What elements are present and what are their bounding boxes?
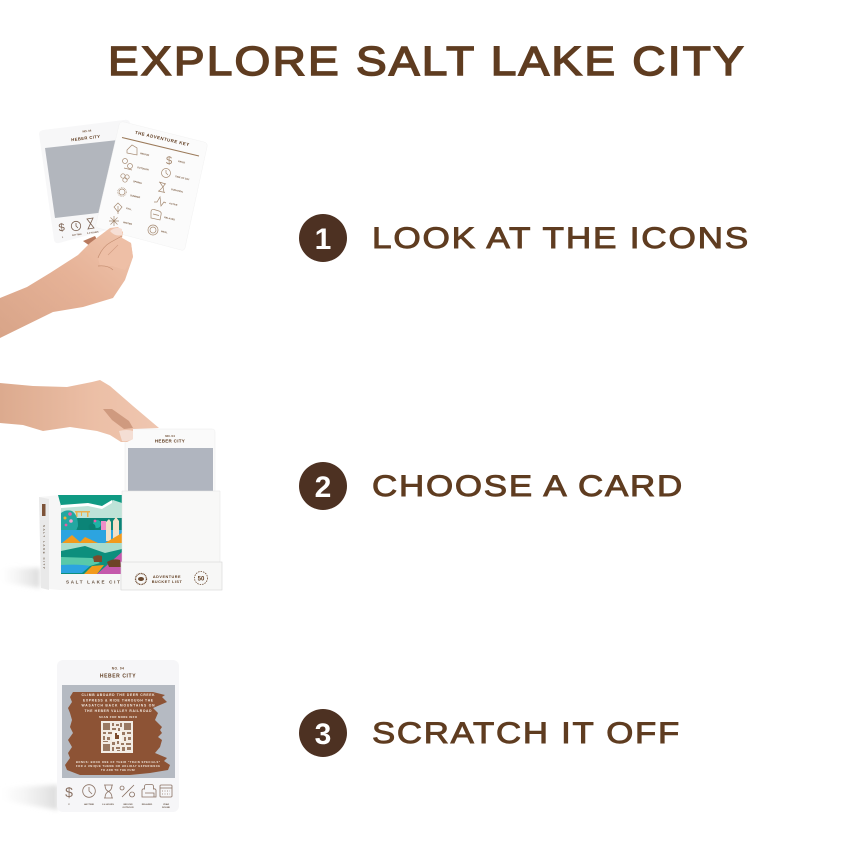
icon labels: ANYTIME — [84, 803, 94, 806]
icon labels: ROUND — [162, 807, 170, 809]
card: the adventure key: SUMMER — [130, 195, 141, 199]
card: back card with scratch panel: $ — [58, 222, 65, 234]
step 2 label: CHOOSE A CARD — [372, 470, 684, 503]
scratch message: TO ADD TO THE FUN! — [101, 768, 135, 772]
QR code — [101, 721, 133, 753]
icon labels: RELAXED — [142, 803, 153, 806]
card: the adventure key: FALL — [126, 207, 133, 211]
box artwork — [58, 495, 122, 574]
box sleeve: 50 — [198, 576, 205, 582]
card being pulled from sleeve: HEBER CITY — [155, 438, 185, 444]
box: salt lake city deck: SALT LAKE CITY — [42, 525, 46, 570]
step 3 badge: 3 — [315, 718, 331, 751]
hand pulling card — [0, 380, 159, 442]
card: the adventure key: DURATION — [171, 188, 183, 194]
card: the adventure key: ACTIVE — [169, 202, 178, 207]
card: Heber City scratched: NO. 04 — [112, 666, 124, 670]
step 2: illustration of hand choosing a card from box — [0, 380, 222, 590]
scratch message: CLIMB ABOARD THE DEER CREEK — [82, 693, 155, 697]
card: the adventure key: $ — [166, 155, 172, 167]
step 3 label: SCRATCH IT OFF — [372, 717, 681, 750]
icon labels: YEAR — [163, 803, 169, 806]
step 2 badge: 2 — [315, 471, 331, 504]
card being pulled from sleeve: NO. 04 — [165, 434, 175, 438]
box shadow — [0, 568, 40, 588]
step 3 badge — [299, 709, 347, 757]
finger behind cards — [83, 236, 100, 246]
icon row — [65, 784, 172, 800]
card: the adventure key: THE ADVENTURE KEY — [135, 130, 190, 147]
card: back card with scratch panel: $ — [62, 237, 64, 239]
icon labels: OUTDOOR — [122, 807, 134, 809]
card: the adventure key: SPRING — [133, 181, 142, 185]
scratch message: EXPRESS & RIDE THROUGH THE — [83, 698, 154, 702]
card: the adventure key: INDOOR — [140, 153, 150, 157]
card: back card with scratch panel — [39, 120, 137, 243]
icon labels: INDOOR/ — [123, 804, 133, 806]
card: Heber City scratched: HEBER CITY — [100, 674, 136, 680]
box: salt lake city deck: SALT LAKE CIT — [66, 580, 122, 584]
box sleeve — [121, 491, 222, 590]
icon labels: 2-4 HOURS — [102, 803, 114, 806]
card: the adventure key: TIME OF DAY — [175, 175, 190, 181]
card: the adventure key: RELAXED — [164, 216, 175, 222]
card: the adventure key: MEAL — [161, 230, 168, 235]
step 1 badge — [299, 214, 347, 262]
icon labels — [68, 803, 170, 809]
card: the adventure key — [96, 122, 207, 250]
icon labels: $ — [68, 804, 70, 806]
step 1 badge: 1 — [315, 223, 331, 256]
scratch message: FOR A UNIQUE THEME OR HOLIDAY EXPERIENCE — [76, 764, 160, 768]
scratch message — [76, 693, 161, 772]
card: back card with scratch panel: NO. 04 — [82, 128, 92, 134]
icon row: $ — [65, 784, 73, 800]
card: the adventure key: OUTDOOR — [137, 167, 149, 172]
card: the adventure key: WINTER — [123, 222, 132, 226]
card being pulled from sleeve — [125, 429, 215, 491]
scratched reveal — [65, 692, 170, 775]
scratch message: BONUS: BOOK ONE OF THEIR "TRAIN SPECIALS" — [76, 760, 161, 764]
card: back card with scratch panel: 2-4 HOURS — [87, 231, 99, 235]
card: the adventure key: PRICE — [178, 161, 186, 165]
box: salt lake city deck — [39, 495, 122, 590]
step 1: illustration of hand holding two cards — [0, 120, 207, 338]
box sleeve: ADVENTURE — [153, 575, 181, 579]
scratch message: SCAN FOR MORE INFO — [99, 715, 138, 719]
scratch message: THE HEBER VALLEY RAILROAD — [84, 709, 152, 713]
card: Heber City scratched — [57, 660, 179, 812]
card shadow — [0, 785, 58, 810]
scratch message: WASATCH BACK MOUNTAINS ON — [82, 704, 155, 708]
hand holding cards — [0, 227, 133, 338]
title: EXPLORE SALT LAKE CITY — [108, 38, 746, 84]
step 1 label: LOOK AT THE ICONS — [372, 222, 750, 255]
card: back card with scratch panel: HEBER CITY — [71, 134, 101, 142]
card: back card with scratch panel: ANYTIME — [72, 233, 82, 237]
step 3: illustration of scratched card — [0, 660, 179, 812]
step 2 badge — [299, 462, 347, 510]
box sleeve: BUCKET LIST — [152, 580, 182, 584]
